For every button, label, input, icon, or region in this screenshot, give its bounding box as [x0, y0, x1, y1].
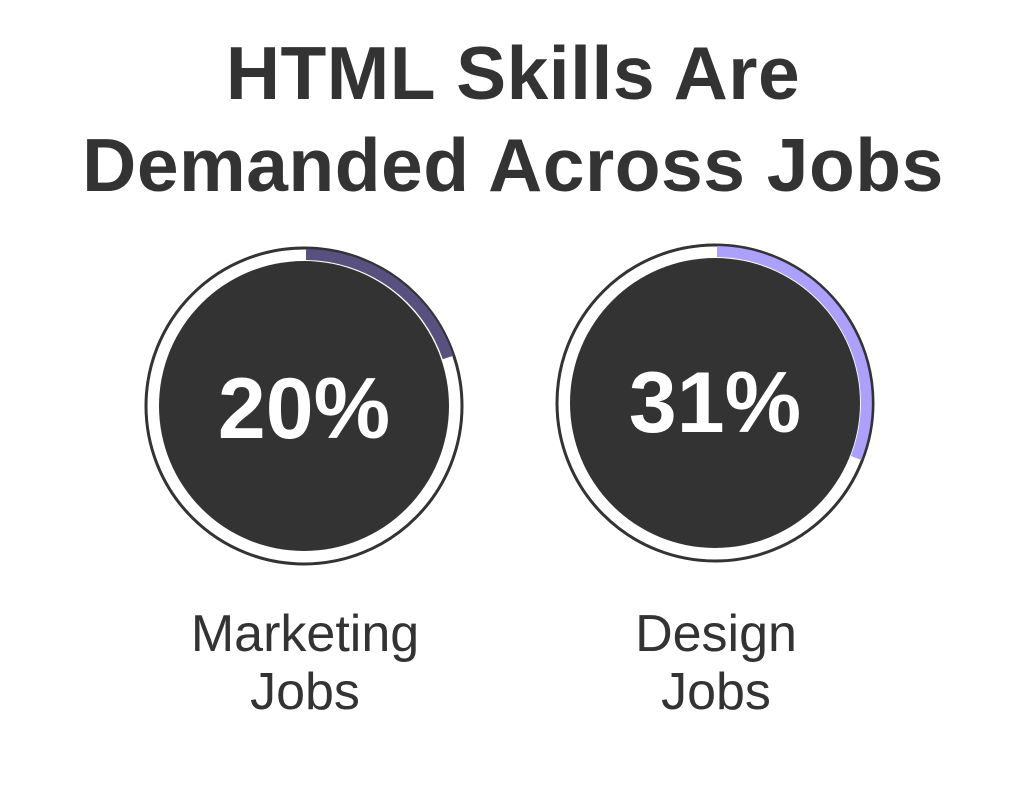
title: Demanded Across Jobs [82, 123, 944, 207]
title: HTML Skills Are [226, 31, 800, 115]
label: design jobs: Design [635, 605, 797, 663]
label: marketing jobs [191, 605, 419, 721]
arc: 31% [717, 252, 866, 458]
label: marketing jobs: Marketing [191, 605, 419, 663]
title [82, 31, 944, 207]
value: 20%: 20% [218, 361, 390, 457]
panel: design gauge [557, 245, 873, 561]
value: 31%: 31% [629, 355, 801, 451]
panel: marketing gauge [146, 248, 462, 564]
label: marketing jobs: Jobs [250, 663, 360, 721]
label: design jobs: Jobs [661, 663, 771, 721]
arc: 20% [306, 254, 448, 358]
label: design jobs [635, 605, 797, 721]
